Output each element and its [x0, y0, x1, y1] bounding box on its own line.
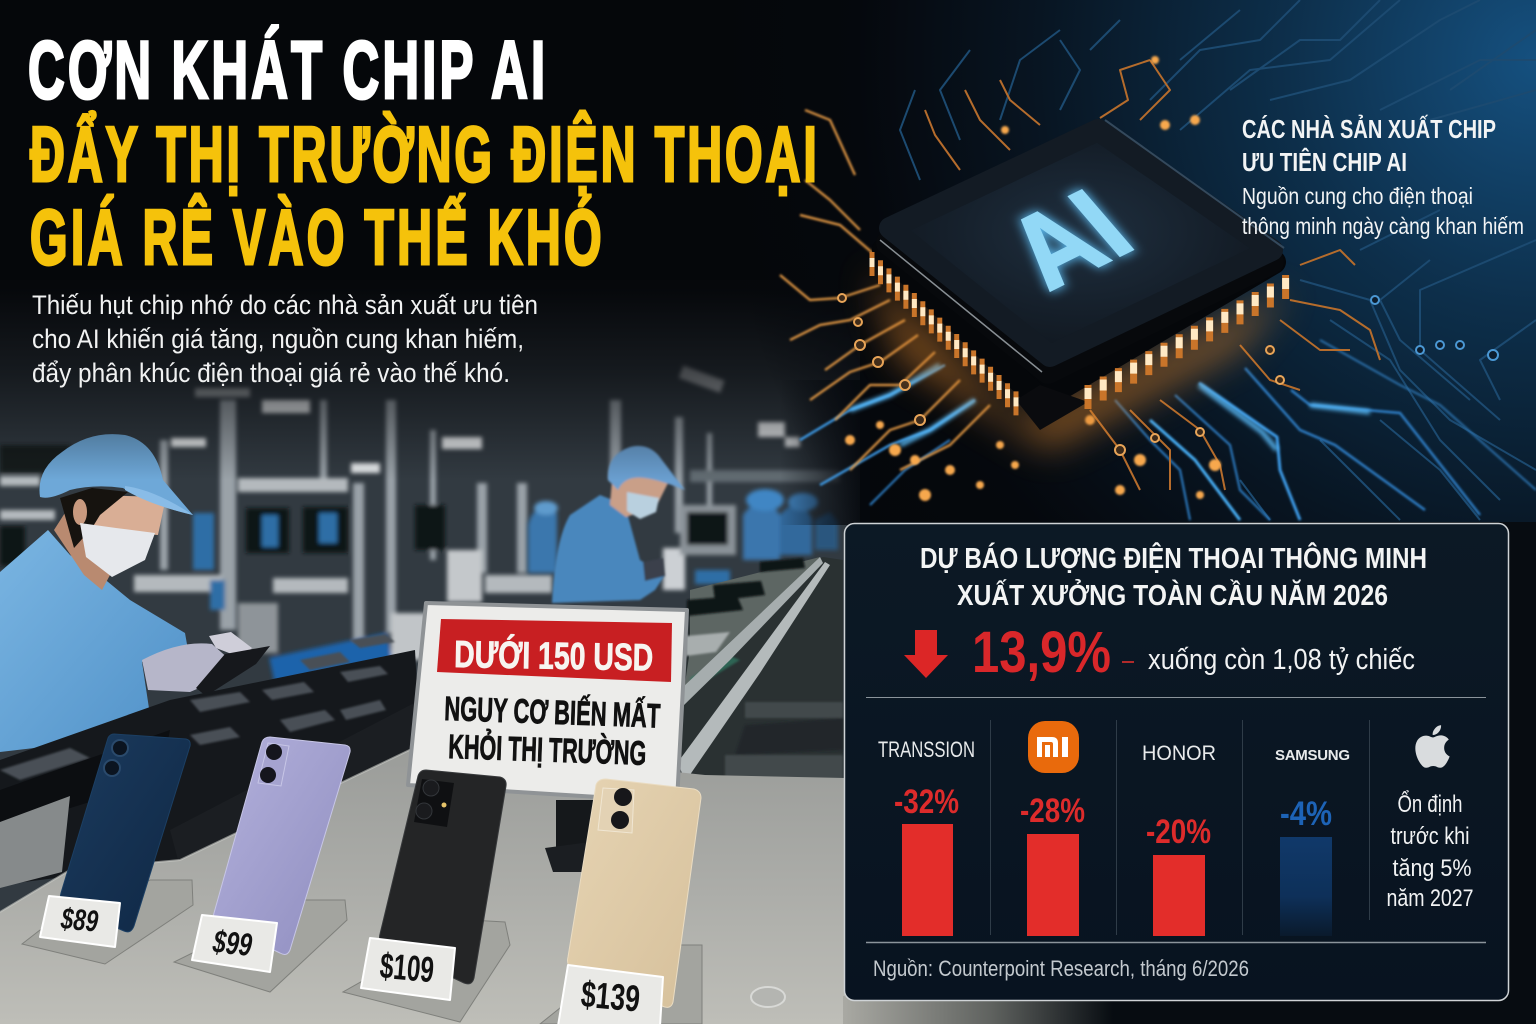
- blue traces: [800, 340, 1536, 520]
- phone: lavender: [213, 737, 350, 954]
- chip label: AI: AI: [981, 168, 1155, 310]
- column: Apple: tăng 5%: [1392, 855, 1472, 882]
- background: blue circuit glow: [700, 0, 1536, 524]
- dim background traces: [900, 0, 1536, 520]
- price tag: $99: $99: [210, 923, 254, 963]
- top fade into dark header: [0, 0, 860, 480]
- column: Samsung: -4%: [1280, 795, 1332, 833]
- background workers: [528, 489, 838, 573]
- column: Apple: năm 2027: [1386, 885, 1474, 912]
- callout: chip makers prioritise AI: Nguồn cung cho điện thoại: [1242, 183, 1473, 209]
- price tag: $89: $89: [59, 902, 100, 939]
- dash: [1122, 661, 1134, 663]
- panel heading: DỰ BÁO LƯỢNG ĐIỆN THOẠI THÔNG MINH: [920, 541, 1427, 575]
- AI chip: [870, 120, 1290, 450]
- column: Samsung: [1275, 747, 1350, 936]
- clear disc on table: [751, 987, 785, 1007]
- subtitle: cho AI khiến giá tăng, nguồn cung khan hiếm,: [32, 324, 524, 354]
- price tag: $89: [40, 896, 120, 947]
- phone: navy: [60, 734, 190, 932]
- icon: red down arrow: [904, 630, 948, 678]
- conveyor line with rails: [678, 557, 843, 785]
- glowing orange dots: [845, 56, 1221, 501]
- chip glow: [870, 270, 1290, 450]
- price tag: $99: [192, 915, 277, 972]
- bright blue glow traces: [850, 365, 1370, 450]
- column: Apple: trước khi: [1390, 823, 1470, 850]
- side fade of factory above the panel: [780, 380, 870, 525]
- subtitle: đẩy phân khúc điện thoại giá rẻ vào thế khó.: [32, 358, 510, 388]
- sign: under 150 USD: NGUY CƠ BIẾN MẤT: [444, 690, 661, 736]
- title: CƠN KHÁT CHIP AI: [28, 25, 545, 116]
- gloves and phone: [209, 632, 252, 658]
- headline figure: 13,9%: 13,9%: [972, 620, 1111, 685]
- callout: chip makers prioritise AI: ƯU TIÊN CHIP AI: [1242, 147, 1407, 177]
- phone: gold: [568, 779, 701, 1007]
- pads of the circuit traces: [838, 294, 1284, 455]
- panel: smartphone shipment forecast: [844, 524, 1508, 1000]
- source note: Nguồn: Counterpoint Research, tháng 6/2026: [873, 956, 1249, 981]
- column: Transsion: -32%: [894, 783, 959, 821]
- circuit board traces: [780, 0, 1536, 520]
- panel heading: XUẤT XƯỞNG TOÀN CẦU NĂM 2026: [957, 578, 1388, 612]
- chip base: [884, 135, 1274, 400]
- chip label: AI: AI: [981, 168, 1155, 310]
- worker in foreground with cap and mask: [0, 434, 270, 752]
- column: Xiaomi: [1020, 721, 1085, 936]
- column: Transsion: [878, 737, 975, 936]
- column: Transsion: TRANSSION: [878, 737, 975, 762]
- price tag: $109: [361, 938, 455, 1000]
- panel heading: [920, 541, 1427, 612]
- title: GIÁ RÊ VÀO THẾ KHÓ: [30, 193, 602, 281]
- product stands: [22, 880, 702, 1024]
- callout: chip makers prioritise AI: [1242, 114, 1524, 239]
- production tray with phones: [0, 634, 420, 888]
- price tag: $109: $109: [378, 945, 436, 990]
- title: [28, 25, 817, 281]
- column: Honor: [1142, 742, 1216, 936]
- sign: under 150 USD: KHỎI THỊ TRƯỜNG: [448, 728, 647, 773]
- column: Apple: [1386, 725, 1474, 912]
- headline note: xuống còn 1,08 tỷ chiếc: [1148, 644, 1415, 676]
- column: Apple: Ổn định: [1398, 790, 1462, 818]
- display table: [0, 745, 1113, 1024]
- chip top surface: [890, 130, 1272, 356]
- chip side wall: [888, 136, 1272, 372]
- subtitle: Thiếu hụt chip nhớ do các nhà sản xuất ưu tiên: [32, 290, 538, 320]
- sign: under 150 USD: DƯỚI 150 USD: [454, 632, 654, 679]
- orange traces: right side and above chip: [925, 60, 1380, 490]
- column: Xiaomi: -28%: [1020, 792, 1085, 830]
- price tag: $139: $139: [579, 974, 642, 1020]
- subtitle: [32, 290, 538, 388]
- orange traces: left side: [780, 110, 990, 470]
- title: ĐẨY THỊ TRƯỜNG ĐIỆN THOẠI: [30, 110, 817, 198]
- price tag: $139: [558, 965, 663, 1024]
- column: Honor: HONOR: [1142, 742, 1216, 765]
- worker in background with blue cap: [552, 446, 685, 603]
- column: Honor: -20%: [1146, 813, 1211, 851]
- chip pins: [872, 252, 1286, 415]
- phone: black: [380, 770, 506, 984]
- column: Samsung: SAMSUNG: [1275, 747, 1350, 764]
- sign: under 150 USD: [408, 603, 687, 872]
